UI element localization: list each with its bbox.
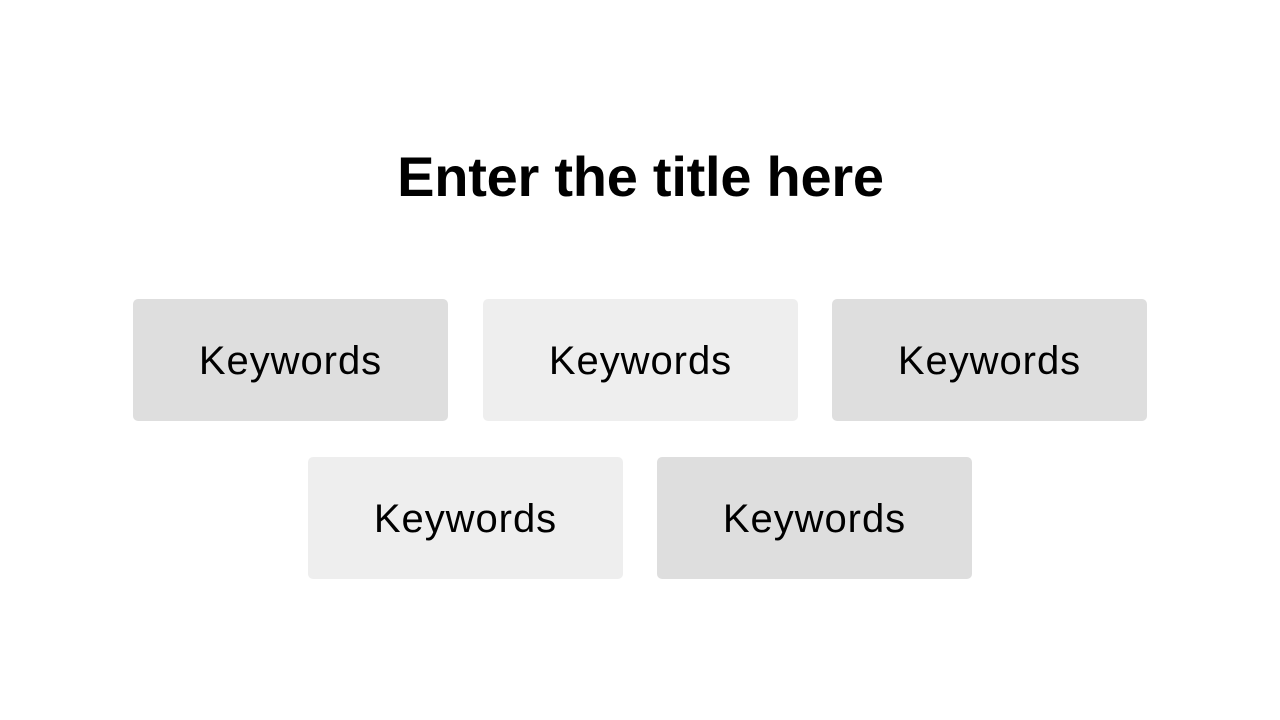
- keyword box 3: Keywords: [898, 339, 1081, 383]
- keyword box 4: [308, 457, 623, 579]
- title: Enter the title here: [397, 145, 884, 208]
- keyword box 1: [133, 299, 448, 421]
- keyword box 2: [483, 299, 798, 421]
- keyword box 2: Keywords: [549, 339, 732, 383]
- keyword box 3: [832, 299, 1147, 421]
- keyword box 4: Keywords: [374, 497, 557, 541]
- keyword box 1: Keywords: [199, 339, 382, 383]
- keyword box 5: Keywords: [723, 497, 906, 541]
- keyword box 5: [657, 457, 972, 579]
